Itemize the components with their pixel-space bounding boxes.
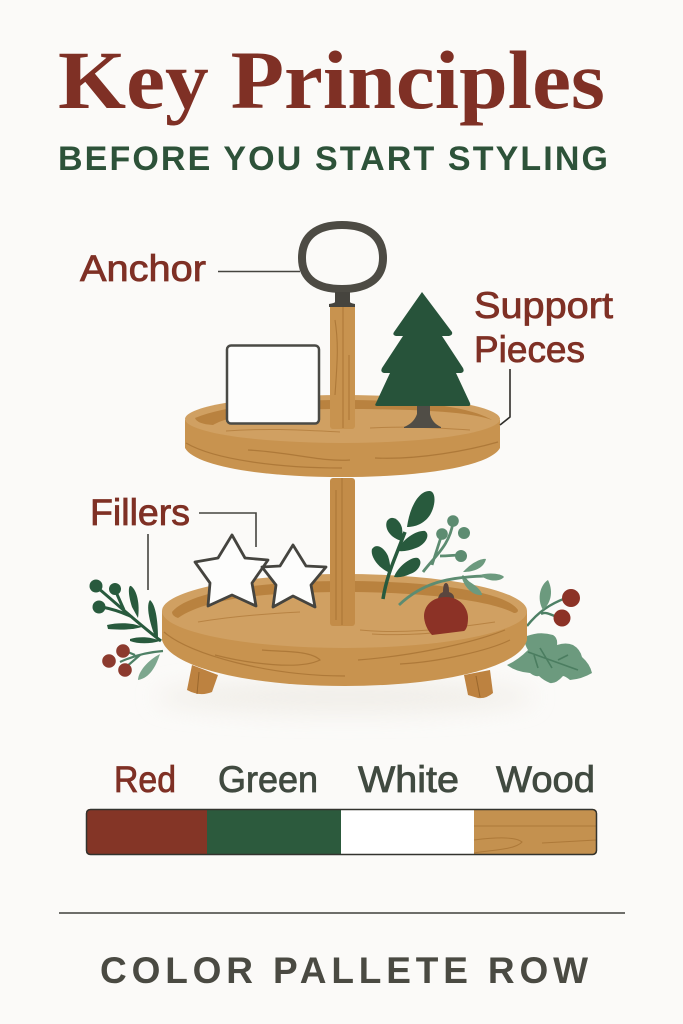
color palette bar (86, 809, 597, 855)
icon: green pine tree (375, 292, 470, 428)
color names: Wood (496, 759, 595, 800)
icon: red ornament (424, 583, 468, 635)
color names: White (358, 759, 459, 800)
label: fillers: Fillers (90, 492, 190, 533)
label: anchor: Anchor (80, 248, 206, 289)
label: support pieces (474, 285, 614, 425)
color names: Green (218, 759, 318, 800)
icon: left side sprig with green and red berries (90, 580, 163, 680)
label: support pieces: Support (474, 285, 614, 326)
subtitle: BEFORE YOU START STYLING (58, 140, 608, 178)
tray shadow (155, 681, 535, 713)
divider line (59, 912, 625, 914)
label: fillers (90, 492, 256, 590)
white square sign (227, 346, 319, 424)
icon: outlined white stars (195, 535, 326, 607)
title: Key Principles (58, 34, 605, 126)
color names (114, 759, 595, 800)
tiered wooden tray (90, 225, 592, 698)
lower post (330, 478, 355, 626)
icon: dark green leaf sprig (372, 491, 434, 599)
footer caption: COLOR PALLETE ROW (100, 950, 588, 991)
icon: right side sprig with berries and oak leaf (507, 580, 592, 683)
icon: pale green berry sprig (399, 515, 504, 605)
label: support pieces: Pieces (474, 329, 585, 370)
lower tray (162, 574, 527, 686)
top tray (185, 395, 500, 477)
color names: Red (114, 759, 176, 800)
anchor handle (302, 225, 383, 307)
lower tray legs (187, 665, 493, 698)
upper post (330, 304, 355, 429)
